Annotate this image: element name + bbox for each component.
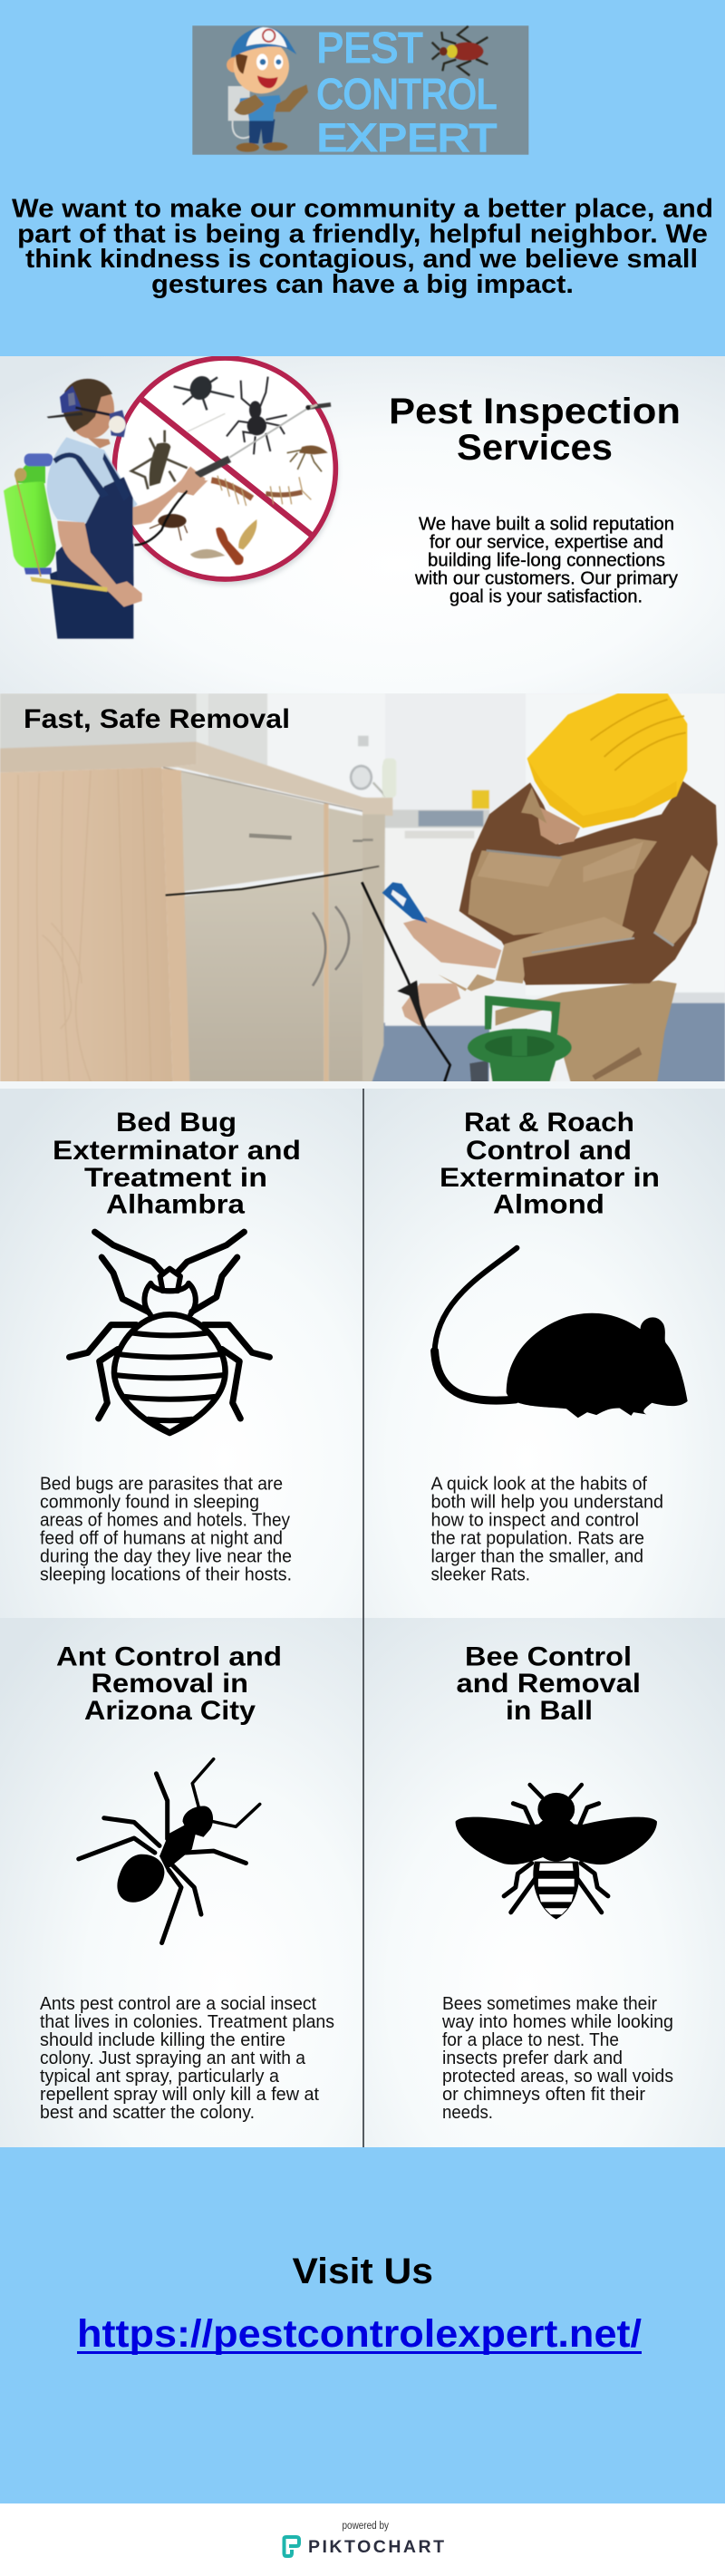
helmet and face <box>521 693 687 845</box>
website link: https://pestcontrolexpert.net/ <box>77 2312 642 2356</box>
panel: pest inspection services <box>0 356 725 693</box>
heading <box>389 392 681 468</box>
body text: should include killing the entire <box>40 2030 285 2050</box>
logo bug <box>432 26 488 75</box>
heading: Control and <box>466 1136 632 1166</box>
icon: rat <box>435 1248 688 1418</box>
body text: We have built a solid reputation <box>419 515 674 535</box>
heading: Pest Inspection <box>389 392 681 431</box>
photo: technician in hard hat <box>362 693 725 1083</box>
logo wordmark <box>316 24 497 160</box>
footer: powered by Piktochart: PIKTOCHART <box>308 2537 444 2557</box>
gap strip <box>0 1081 725 1089</box>
heading: Exterminator and <box>53 1136 301 1166</box>
panel: bee control <box>364 1618 725 2147</box>
body text: Bed bugs are parasites that are <box>40 1474 283 1494</box>
green sprayer <box>468 995 572 1083</box>
heading: Visit Us <box>292 2252 433 2291</box>
heading <box>440 1108 660 1220</box>
intro text: gestures can have a big impact. <box>151 270 574 299</box>
heading: Treatment in <box>84 1163 267 1193</box>
icon: bee <box>456 1785 657 1919</box>
heading: Ant Control and <box>56 1642 282 1671</box>
body text: insects prefer dark and <box>442 2048 623 2068</box>
body text: best and scatter the colony. <box>40 2103 255 2123</box>
heading: Rat & Roach <box>464 1108 634 1138</box>
body text <box>441 1994 673 2123</box>
body text: goal is your satisfaction. <box>450 587 643 607</box>
body text: that lives in colonies. Treatment plans <box>40 2012 334 2032</box>
prohibition sign <box>114 358 338 585</box>
logo wordmark: CONTROL <box>316 71 497 118</box>
technician <box>30 379 206 639</box>
body text <box>414 515 678 607</box>
body text: protected areas, so wall voids <box>442 2067 673 2087</box>
body text: during the day they live near the <box>40 1546 292 1566</box>
icon: ant <box>79 1759 260 1943</box>
body text: Bees sometimes make their <box>442 1994 657 2014</box>
body text: sleeping locations of their hosts. <box>40 1564 292 1584</box>
illustration: technician and prohibition sign <box>4 358 338 639</box>
body text: colony. Just spraying an ant with a <box>40 2048 306 2068</box>
body text: commonly found in sleeping <box>40 1492 259 1512</box>
body text: building life-long connections <box>428 551 665 571</box>
body text: sleeker Rats. <box>431 1564 530 1584</box>
body text: for a place to nest. The <box>442 2030 619 2050</box>
intro text: part of that is being a friendly, helpful neighbor. We <box>17 219 708 248</box>
center divider <box>362 1089 364 2147</box>
heading <box>457 1642 641 1726</box>
photo heading: Fast, Safe Removal <box>24 704 290 734</box>
insects <box>131 373 328 565</box>
icon: bed bug <box>70 1232 269 1433</box>
heading: Removal in <box>91 1669 248 1699</box>
heading: Arizona City <box>84 1696 256 1726</box>
icon: Piktochart logo <box>285 2537 299 2556</box>
body text: both will help you understand <box>431 1492 663 1512</box>
footer: powered by Piktochart: powered by <box>343 2521 389 2532</box>
heading: Bed Bug <box>116 1108 237 1138</box>
heading <box>53 1108 301 1220</box>
panel: ant control <box>0 1618 362 2147</box>
body text <box>40 1474 292 1584</box>
body text: typical ant spray, particularly a <box>40 2067 280 2087</box>
panel: rat and roach <box>364 1089 725 1618</box>
panel: fast safe removal photo <box>0 693 725 1083</box>
heading: Almond <box>493 1189 604 1220</box>
photo: kitchen cabinet <box>0 693 403 1083</box>
body text: how to inspect and control <box>431 1510 639 1530</box>
panel: bed bug <box>0 1089 362 1618</box>
body text: A quick look at the habits of <box>431 1474 647 1494</box>
logo wordmark: EXPERT <box>316 117 497 160</box>
body text: Ants pest control are a social insect <box>40 1994 316 2014</box>
body text: for our service, expertise and <box>430 533 663 553</box>
body text: or chimneys often fit their <box>442 2085 645 2105</box>
tester and hands <box>362 882 501 1083</box>
body text: areas of homes and hotels. They <box>40 1510 290 1530</box>
header band <box>0 0 725 356</box>
heading <box>56 1642 282 1726</box>
intro text: think kindness is contagious, and we believe small <box>25 245 698 274</box>
worker body <box>438 781 718 1083</box>
body text: way into homes while looking <box>441 2012 673 2032</box>
logo mascot <box>227 27 308 152</box>
cabinet hardware <box>166 836 378 986</box>
body text: feed off of humans at night and <box>40 1528 283 1548</box>
body text: larger than the smaller, and <box>431 1546 643 1566</box>
body text <box>40 1994 334 2123</box>
panel: visit us <box>0 2147 725 2503</box>
heading: in Ball <box>506 1696 593 1726</box>
heading: Exterminator in <box>440 1163 660 1193</box>
logo: Pest Control Expert <box>192 24 528 160</box>
intro text: We want to make our community a better place, and <box>12 194 713 223</box>
intro text <box>12 194 713 299</box>
footer: powered by Piktochart <box>0 2503 725 2576</box>
spray wand <box>134 404 331 545</box>
body text <box>431 1474 663 1584</box>
heading: and Removal <box>457 1669 641 1699</box>
heading: Alhambra <box>106 1189 246 1220</box>
heading: Bee Control <box>465 1642 632 1671</box>
body text: the rat population. Rats are <box>431 1528 644 1548</box>
body text: repellent spray will only kill a few at <box>40 2085 319 2105</box>
logo wordmark: PEST <box>316 24 423 71</box>
backpack sprayer <box>4 453 56 576</box>
heading: Services <box>457 428 613 468</box>
body text: with our customers. Our primary <box>414 569 678 589</box>
body text: needs. <box>442 2103 493 2123</box>
